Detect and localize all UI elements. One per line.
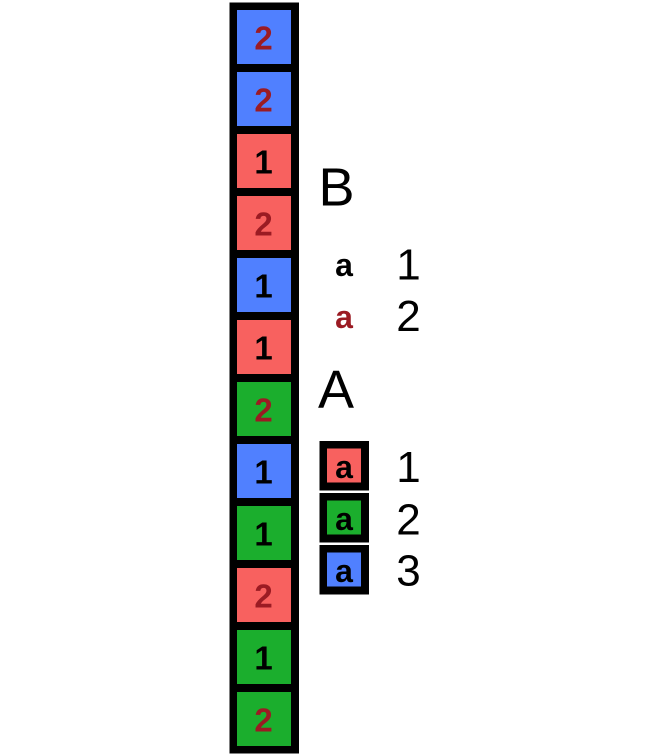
cell 9: green, 1: 1 bbox=[254, 516, 273, 552]
legend A entry 3: 3 bbox=[396, 546, 421, 596]
legend A entry 2: a bbox=[335, 501, 353, 537]
cell 11: green, 1: 1 bbox=[254, 640, 273, 676]
cell 2: blue, 2 bbox=[237, 72, 291, 126]
legend B entry 2 bbox=[335, 292, 421, 341]
cell 3: red, 1: 1 bbox=[254, 144, 273, 180]
legend B entry 1 bbox=[335, 240, 421, 290]
legend A entry 1: a bbox=[335, 449, 353, 485]
cell 1: blue, 2: 2 bbox=[254, 20, 273, 56]
legend A: cell colours bbox=[320, 441, 421, 596]
cell 7: green, 2: 2 bbox=[254, 392, 273, 428]
legend B entry 1: 1 bbox=[396, 240, 421, 290]
cell 12: green, 2 bbox=[237, 692, 291, 746]
cell 2: blue, 2: 2 bbox=[254, 82, 273, 118]
legend A entry 1: 1 bbox=[396, 443, 421, 492]
heatmap column bbox=[230, 2, 299, 754]
legend A entry 2 bbox=[320, 493, 421, 544]
legend A entry 3: a bbox=[335, 553, 353, 589]
cell 11: green, 1 bbox=[237, 630, 291, 684]
legend A entry 2: 2 bbox=[396, 496, 421, 544]
cell 5: blue, 1 bbox=[237, 258, 291, 312]
cell 1: blue, 2 bbox=[237, 10, 291, 64]
cell 9: green, 1 bbox=[237, 506, 291, 560]
cell 10: red, 2 bbox=[237, 568, 291, 622]
cell 4: red, 2 bbox=[237, 196, 291, 250]
cell 12: green, 2: 2 bbox=[254, 702, 273, 738]
legend A entry 3 bbox=[320, 545, 421, 596]
legend B: text colours bbox=[335, 240, 421, 341]
cell 6: red, 1 bbox=[237, 320, 291, 374]
legend B entry 1: a bbox=[335, 247, 353, 283]
legend A entry 1 bbox=[320, 441, 421, 492]
cell 5: blue, 1: 1 bbox=[254, 268, 273, 304]
legend heading A: A bbox=[318, 360, 354, 420]
cell 7: green, 2 bbox=[237, 382, 291, 436]
cell 6: red, 1: 1 bbox=[254, 330, 273, 366]
legend B entry 2: a bbox=[335, 299, 353, 335]
legend heading B: B bbox=[318, 158, 355, 218]
cell 3: red, 1 bbox=[237, 134, 291, 188]
cell 8: blue, 1 bbox=[237, 444, 291, 498]
legend B entry 2: 2 bbox=[396, 292, 421, 341]
cell 10: red, 2: 2 bbox=[254, 578, 273, 614]
cell 8: blue, 1: 1 bbox=[254, 454, 273, 490]
cell 4: red, 2: 2 bbox=[254, 206, 273, 242]
